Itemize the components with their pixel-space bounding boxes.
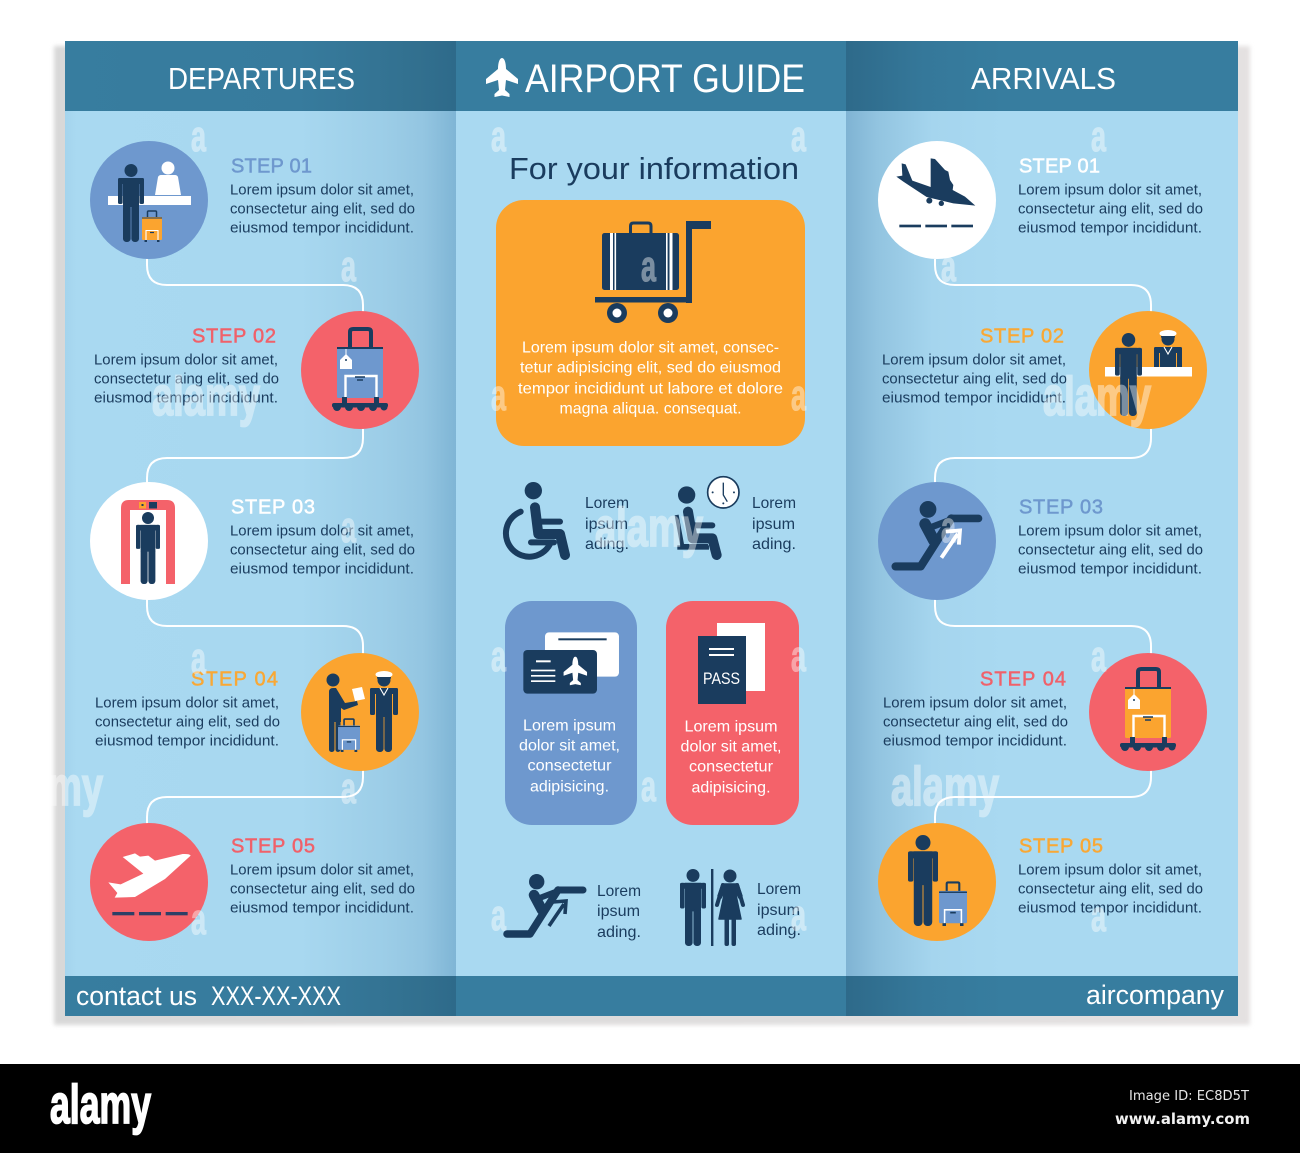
text: restrooms: ading.: [757, 922, 801, 939]
watermarks: a: [791, 112, 806, 161]
step 04 text: Lorem ipsum dolor sit amet,: [883, 695, 1067, 711]
watermarks: a: [491, 112, 506, 161]
step 02 text: [882, 326, 1067, 406]
panel: airport guide: [456, 41, 846, 1016]
step 05 text: consectetur aing elit, sed do: [230, 881, 415, 897]
watermarks: a: [341, 764, 356, 813]
watermarks: alamy: [891, 755, 999, 817]
step 03 text: eiusmod tempor incididunt.: [1018, 561, 1202, 577]
header: airport guide: AIRPORT GUIDE: [525, 57, 805, 101]
step 02 icon: luggage on belt: [301, 311, 419, 429]
step 01 text: STEP 01: [1019, 156, 1100, 178]
step 03 text: [230, 497, 415, 577]
step 05 text: [230, 836, 415, 916]
footer: company: aircompany: [1086, 980, 1224, 1010]
text: waiting: [752, 495, 796, 553]
watermarks: a: [491, 891, 506, 940]
step 04 text: STEP 04: [980, 669, 1066, 691]
watermarks: a: [341, 503, 356, 552]
step 03 text: consectetur aing elit, sed do: [1018, 542, 1203, 558]
step 01 text: [1018, 156, 1203, 236]
page shadow: [54, 46, 1250, 1025]
watermarks: a: [191, 895, 206, 944]
connector line: [147, 259, 363, 824]
stock footer bar: [0, 1064, 1300, 1153]
stock logo: alamy: [50, 1073, 151, 1135]
step 01 text: consectetur aing elit, sed do: [230, 201, 415, 217]
connector line: [935, 259, 1151, 824]
step 02 text: consectetur aing elit, sed do: [882, 371, 1067, 387]
step 05 text: consectetur aing elit, sed do: [1018, 881, 1203, 897]
text: waiting: Lorem: [752, 495, 796, 512]
panel: arrivals: [846, 41, 1238, 1016]
step 03 text: consectetur aing elit, sed do: [230, 542, 415, 558]
card text: consectetur: [689, 758, 774, 776]
watermarks: a: [191, 634, 206, 683]
icon: baggage cart: [595, 221, 711, 323]
text: wheelchair: [585, 495, 629, 553]
text: wheelchair: Lorem: [585, 495, 629, 512]
step 03 text: eiusmod tempor incididunt.: [230, 561, 414, 577]
watermarks: a: [491, 632, 506, 681]
step 01 text: eiusmod tempor incididunt.: [1018, 220, 1202, 236]
text: waiting: ipsum: [752, 516, 795, 533]
watermarks: a: [1091, 112, 1106, 161]
step 03 text: [1018, 497, 1203, 577]
card text: adipisicing.: [692, 780, 770, 796]
card text: [519, 718, 620, 796]
image id: Image ID: EC8D5T: [1129, 1088, 1250, 1104]
footer: contact: XXX-XX-XXX: [211, 981, 341, 1011]
step 05 text: [1018, 836, 1203, 916]
step 02 text: eiusmod tempor incididunt.: [94, 390, 278, 406]
icon: restrooms: [680, 869, 743, 946]
step 03 text: STEP 03: [231, 497, 315, 519]
header: airport guide: [456, 41, 846, 111]
panel: departures: [65, 41, 456, 1016]
card text: Lorem ipsum: [523, 718, 616, 734]
text: waiting: ading.: [752, 536, 796, 553]
stock url: www.alamy.com: [1115, 1110, 1250, 1128]
step 02 text: eiusmod tempor incididunt.: [882, 390, 1066, 406]
step 04 text: [883, 669, 1068, 749]
step 05 text: eiusmod tempor incididunt.: [1018, 900, 1202, 916]
watermarks: a: [341, 242, 356, 291]
step 02 text: Lorem ipsum dolor sit amet,: [94, 352, 278, 368]
card text: Lorem ipsum dolor sit amet, consec-: [522, 340, 779, 356]
card text: tempor incididunt ut labore et dolore: [518, 380, 783, 398]
card: baggage cart: [496, 200, 805, 446]
footer band: [456, 976, 846, 1016]
watermarks: alamy: [152, 365, 260, 427]
text: wheelchair: ipsum: [585, 516, 628, 533]
watermarks: a: [491, 371, 506, 420]
step 02 text: [94, 326, 279, 406]
step 03 icon: escalator: [878, 482, 996, 600]
step 05 icon: passenger with bag: [878, 823, 996, 941]
card text: magna aliqua. consequat.: [560, 400, 742, 418]
card text: tetur adipisicing elit, sed do eiusmod: [520, 360, 781, 376]
card: passport: [666, 601, 799, 825]
step 01 icon: check-in desk: [90, 141, 208, 259]
step 01 text: [230, 156, 415, 236]
card: boarding tickets: [505, 601, 637, 825]
card text: [680, 718, 782, 796]
step 03 text: STEP 03: [1019, 497, 1103, 519]
step 04 icon: passport check: [301, 653, 419, 771]
watermarks: [0, 112, 1151, 944]
card text: adipisicing.: [530, 778, 609, 796]
step 04 text: consectetur aing elit, sed do: [95, 714, 280, 730]
icon: waiting seat and clock: [677, 477, 739, 555]
step 05 text: STEP 05: [1019, 836, 1103, 858]
header: arrivals: [846, 41, 1238, 111]
watermarks: a: [941, 242, 956, 291]
watermarks: a: [191, 112, 206, 161]
step 01 text: consectetur aing elit, sed do: [1018, 201, 1203, 217]
watermarks: a: [791, 891, 806, 940]
step 02 icon: passport desk: [1089, 311, 1207, 429]
step 05 text: STEP 05: [231, 836, 315, 858]
card text: dolor sit amet,: [519, 738, 620, 754]
step 02 text: STEP 02: [980, 326, 1064, 348]
icon: passport: [698, 623, 765, 704]
icon: wheelchair: [506, 482, 565, 557]
step 01 text: STEP 01: [231, 156, 312, 178]
text: escalator: [597, 883, 641, 941]
text: wheelchair: ading.: [585, 536, 629, 553]
watermarks: a: [791, 371, 806, 420]
step 05 text: Lorem ipsum dolor sit amet,: [1018, 862, 1202, 878]
step 03 icon: security gate: [90, 482, 208, 600]
icon: escalator: [507, 874, 583, 934]
step 05 text: Lorem ipsum dolor sit amet,: [230, 862, 414, 878]
text: restrooms: Lorem: [757, 881, 801, 898]
step 02 text: Lorem ipsum dolor sit amet,: [882, 352, 1066, 368]
step 04 text: [95, 669, 280, 749]
card text: [518, 340, 783, 418]
watermarks: a: [1091, 892, 1106, 941]
step 02 text: consectetur aing elit, sed do: [94, 371, 279, 387]
footer: contact: contact us: [76, 981, 197, 1011]
watermarks: alamy: [595, 496, 703, 558]
step 03 text: Lorem ipsum dolor sit amet,: [230, 523, 414, 539]
subheading: For your information: [509, 151, 799, 186]
watermarks: a: [791, 632, 806, 681]
header: arrivals: ARRIVALS: [971, 61, 1116, 96]
step 05 icon: plane taking off: [90, 823, 208, 941]
step 01 text: eiusmod tempor incididunt.: [230, 220, 414, 236]
footer: company: [846, 976, 1238, 1016]
footer: contact: [65, 976, 456, 1016]
text: restrooms: ipsum: [757, 902, 800, 919]
icon: tickets: [523, 632, 619, 694]
card text: dolor sit amet,: [680, 738, 782, 756]
step 05 text: eiusmod tempor incididunt.: [230, 900, 414, 916]
card text: consectetur: [528, 758, 612, 774]
icon: passport: PASS: [703, 670, 740, 688]
step 04 text: Lorem ipsum dolor sit amet,: [95, 695, 279, 711]
header: departures: [65, 41, 456, 111]
step 01 text: Lorem ipsum dolor sit amet,: [230, 182, 414, 198]
text: escalator: ipsum: [597, 903, 640, 920]
text: restrooms: [757, 881, 801, 939]
step 04 text: STEP 04: [191, 669, 278, 691]
step 04 text: eiusmod tempor incididunt.: [883, 733, 1067, 749]
step 03 text: Lorem ipsum dolor sit amet,: [1018, 523, 1202, 539]
header: departures: DEPARTURES: [168, 61, 355, 96]
step 02 text: STEP 02: [192, 326, 276, 348]
card text: Lorem ipsum: [684, 718, 778, 736]
watermarks: a: [641, 762, 656, 811]
step 01 text: Lorem ipsum dolor sit amet,: [1018, 182, 1202, 198]
watermarks: alamy: [1043, 365, 1151, 427]
watermarks: a: [941, 503, 956, 552]
watermarks: a: [641, 242, 656, 291]
step 04 text: consectetur aing elit, sed do: [883, 714, 1068, 730]
step 04 text: eiusmod tempor incididunt.: [95, 733, 279, 749]
step 01 icon: plane landing: [878, 141, 996, 259]
watermarks: a: [1091, 632, 1106, 681]
text: escalator: Lorem: [597, 883, 641, 900]
step 04 icon: luggage claim: [1089, 653, 1207, 771]
text: escalator: ading.: [597, 924, 641, 941]
